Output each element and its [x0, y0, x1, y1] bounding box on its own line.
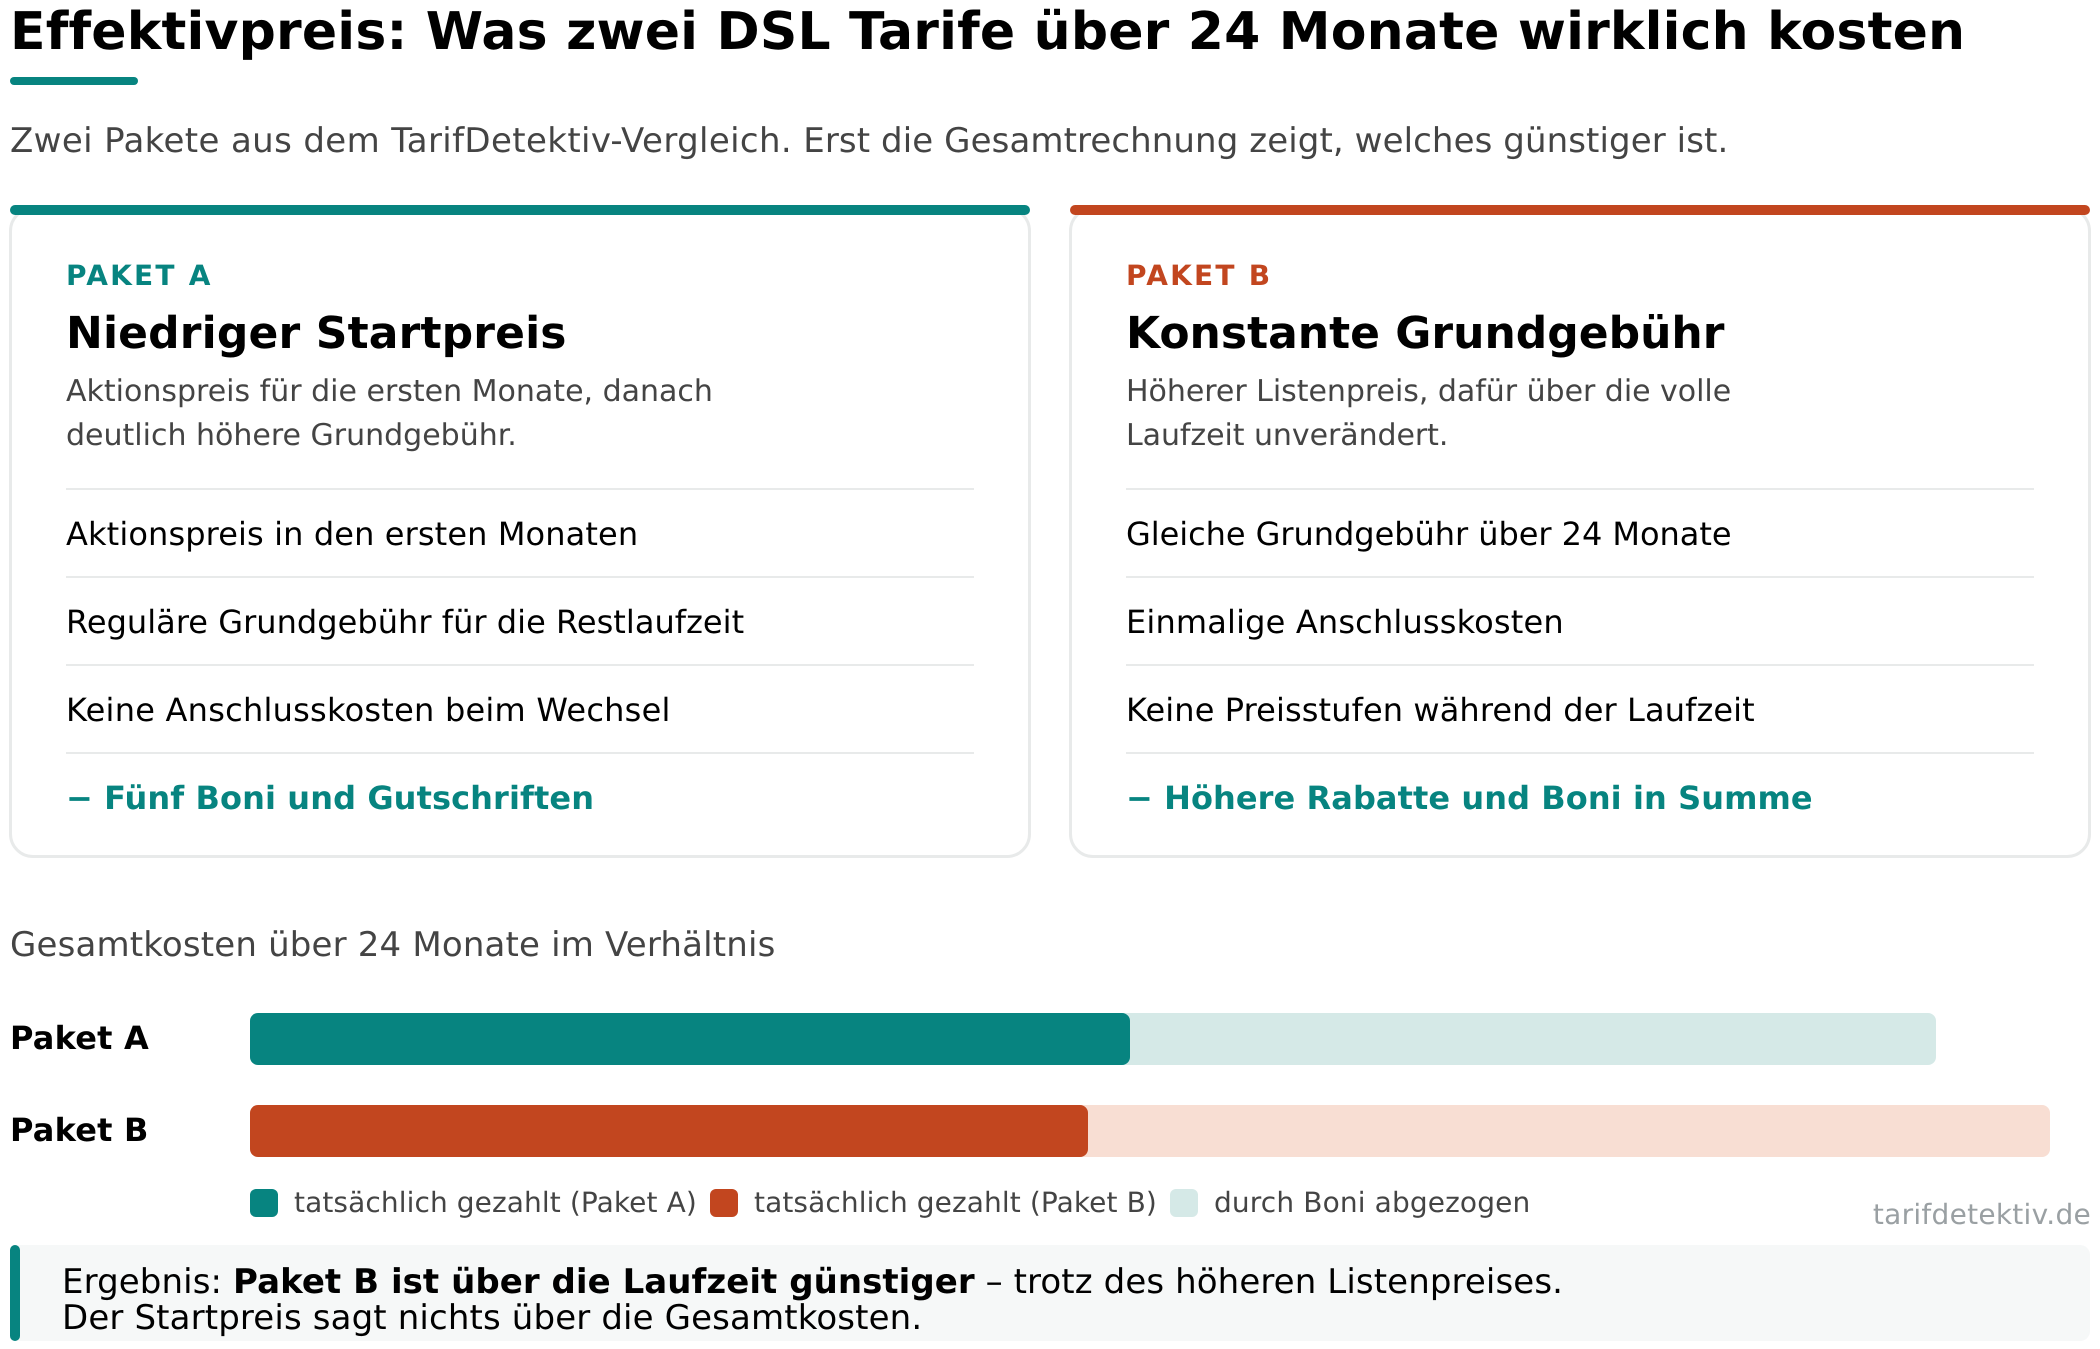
chart heading: Gesamtkosten über 24 Monate im Verhältnis — [10, 925, 775, 965]
label: Paket A: PAKET A — [66, 259, 213, 292]
title accent underline — [10, 77, 138, 85]
list item: Keine Anschlusskosten beim Wechsel — [66, 691, 671, 729]
bar: Paket B paid — [250, 1105, 1088, 1157]
bar: Paket A paid — [250, 1013, 1130, 1065]
label: Paket B: PAKET B — [1126, 259, 1272, 292]
heading: Niedriger Startpreis: Niedriger Startpreis — [66, 308, 567, 359]
description: Höherer Listenpreis, dafür über die volle — [1126, 374, 1731, 409]
legend: durch Boni abgezogen — [1214, 1186, 1530, 1219]
callout text: Ergebnis: Paket B ist über die Laufzeit günstiger – trotz des höheren Listenpreises. — [62, 1262, 1563, 1302]
callout accent stripe — [10, 1245, 20, 1341]
description: deutlich höhere Grundgebühr. — [66, 418, 517, 453]
list item: Reguläre Grundgebühr für die Restlaufzeit — [66, 603, 744, 641]
list item: Aktionspreis in den ersten Monaten — [66, 515, 638, 553]
legend — [250, 1186, 1530, 1219]
description: Laufzeit unverändert. — [1126, 418, 1448, 453]
bar: Paket A total — [250, 1013, 1936, 1065]
subtitle: Zwei Pakete aus dem TarifDetektiv-Vergleich. Erst die Gesamtrechnung zeigt, welches günstiger ist. — [10, 121, 1728, 161]
list item: Gleiche Grundgebühr über 24 Monate — [1126, 515, 1731, 553]
legend: tatsächlich gezahlt (Paket A) — [294, 1186, 697, 1219]
bar chart — [10, 1013, 2050, 1157]
legend: tatsächlich gezahlt (Paket B) — [754, 1186, 1157, 1219]
row label: Paket B: Paket B — [10, 1111, 149, 1149]
list item: Einmalige Anschlusskosten — [1126, 603, 1564, 641]
callout: result — [10, 1245, 2090, 1341]
panel: Paket A — [9, 205, 1031, 858]
title: Effektivpreis: Was zwei DSL Tarife über 24 Monate wirklich kosten — [10, 2, 1965, 62]
heading: Konstante Grundgebühr: Konstante Grundgebühr — [1126, 308, 1724, 359]
panel: Paket B — [1069, 205, 2091, 858]
description: Aktionspreis für die ersten Monate, danach — [66, 374, 713, 409]
description — [1126, 374, 1731, 453]
row label: Paket A: Paket A — [10, 1019, 149, 1057]
description — [66, 374, 713, 453]
bonus line: − Fünf Boni und Gutschriften — [66, 779, 594, 817]
callout text — [62, 1262, 1563, 1338]
bonus line: − Höhere Rabatte und Boni in Summe — [1126, 779, 1813, 817]
bar: Paket B total — [250, 1105, 2050, 1157]
source credit: tarifdetektiv.de — [1873, 1198, 2091, 1231]
list item: Keine Preisstufen während der Laufzeit — [1126, 691, 1755, 729]
callout text: Der Startpreis sagt nichts über die Gesamtkosten. — [62, 1298, 922, 1338]
